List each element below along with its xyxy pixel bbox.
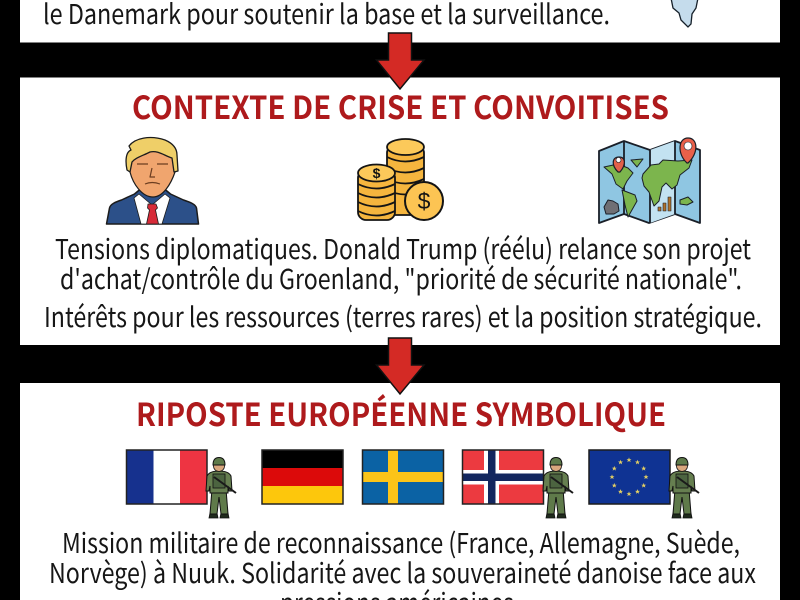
panel: contexte de crise et convoitises	[20, 78, 780, 345]
heading: contexte de crise: CONTEXTE DE CRISE ET CONVOITISES	[132, 83, 669, 129]
flag: Germany	[262, 450, 343, 504]
icon: Greenland map fragment	[671, 0, 698, 27]
flag: Norway	[462, 450, 544, 504]
flag: Sweden	[362, 450, 444, 504]
icon label: dollar signs: $	[418, 188, 431, 214]
arrow: contexte to riposte	[376, 338, 424, 394]
icon: soldier beside EU flag	[669, 458, 699, 518]
arrow: top section to contexte	[376, 33, 424, 89]
text: mission militaire	[49, 521, 756, 600]
panel: riposte européenne symbolique	[20, 383, 780, 600]
icon: stacks of gold coins	[358, 139, 443, 220]
text: tensions diplomatiques	[55, 227, 751, 297]
icon label: dollar signs: $	[373, 165, 381, 181]
heading: riposte européenne: RIPOSTE EUROPÉENNE SYMBOLIQUE	[136, 390, 666, 436]
panel: top section (cropped)	[20, 0, 780, 42]
flag: European Union	[589, 450, 670, 504]
icon: Donald Trump portrait	[106, 138, 198, 224]
icon: soldier beside Norway flag	[543, 458, 573, 518]
icon: world map with pins	[599, 138, 700, 223]
flag: France	[126, 450, 207, 504]
icon label: dollar signs	[373, 165, 431, 214]
icon: soldier beside France flag	[206, 458, 236, 518]
